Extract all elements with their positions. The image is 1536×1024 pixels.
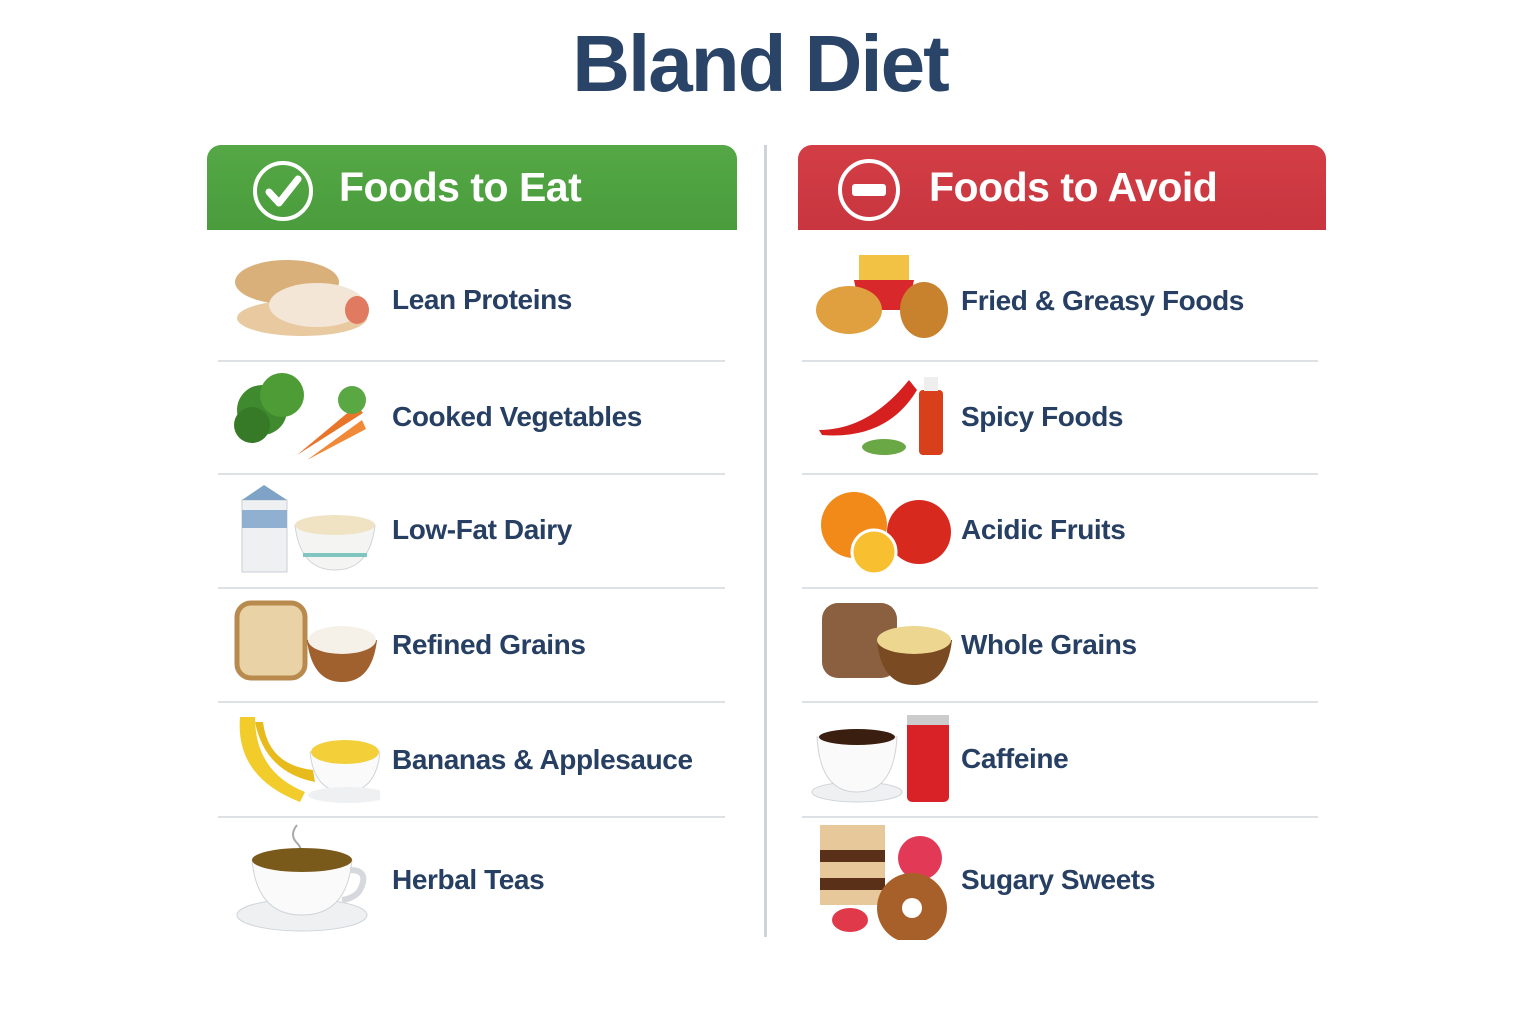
divider xyxy=(764,145,767,937)
header: foods to eat: Foods to Eat xyxy=(339,164,581,210)
item: refined grains xyxy=(234,600,586,682)
item: acidic fruits: Acidic Fruits xyxy=(961,514,1125,545)
item: lean proteins: Lean Proteins xyxy=(392,284,572,315)
item: fried & greasy foods xyxy=(816,255,1244,338)
icon: minus xyxy=(838,159,900,221)
item: lean proteins xyxy=(235,260,572,336)
header: foods to avoid: Foods to Avoid xyxy=(929,164,1217,210)
item: low-fat dairy: Low-Fat Dairy xyxy=(392,514,572,545)
item: whole grains xyxy=(822,603,1137,685)
icon: check xyxy=(253,161,313,221)
item: bananas & applesauce xyxy=(240,717,693,803)
item: sugary sweets: Sugary Sweets xyxy=(961,864,1155,895)
item: sugary sweets xyxy=(820,825,1155,940)
item: herbal teas xyxy=(236,824,544,932)
panel: foods to avoid xyxy=(798,145,1326,940)
header: foods to avoid xyxy=(798,145,1326,230)
item: caffeine xyxy=(812,715,1068,802)
header: foods to eat xyxy=(207,145,737,230)
item: whole grains: Whole Grains xyxy=(961,629,1137,660)
item: low-fat dairy xyxy=(242,485,572,572)
item: spicy foods xyxy=(819,377,1123,455)
title: Bland Diet xyxy=(572,19,948,108)
item: acidic fruits xyxy=(821,492,1125,572)
item: cooked vegetables xyxy=(234,373,642,460)
item: spicy foods: Spicy Foods xyxy=(961,401,1123,432)
item: herbal teas: Herbal Teas xyxy=(392,864,544,895)
panel: foods to eat xyxy=(207,145,737,932)
item: bananas & applesauce: Bananas & Applesauce xyxy=(392,744,693,775)
item: refined grains: Refined Grains xyxy=(392,629,586,660)
item: cooked vegetables: Cooked Vegetables xyxy=(392,401,642,432)
item: fried & greasy foods: Fried & Greasy Foods xyxy=(961,285,1244,316)
item: caffeine: Caffeine xyxy=(961,743,1068,774)
